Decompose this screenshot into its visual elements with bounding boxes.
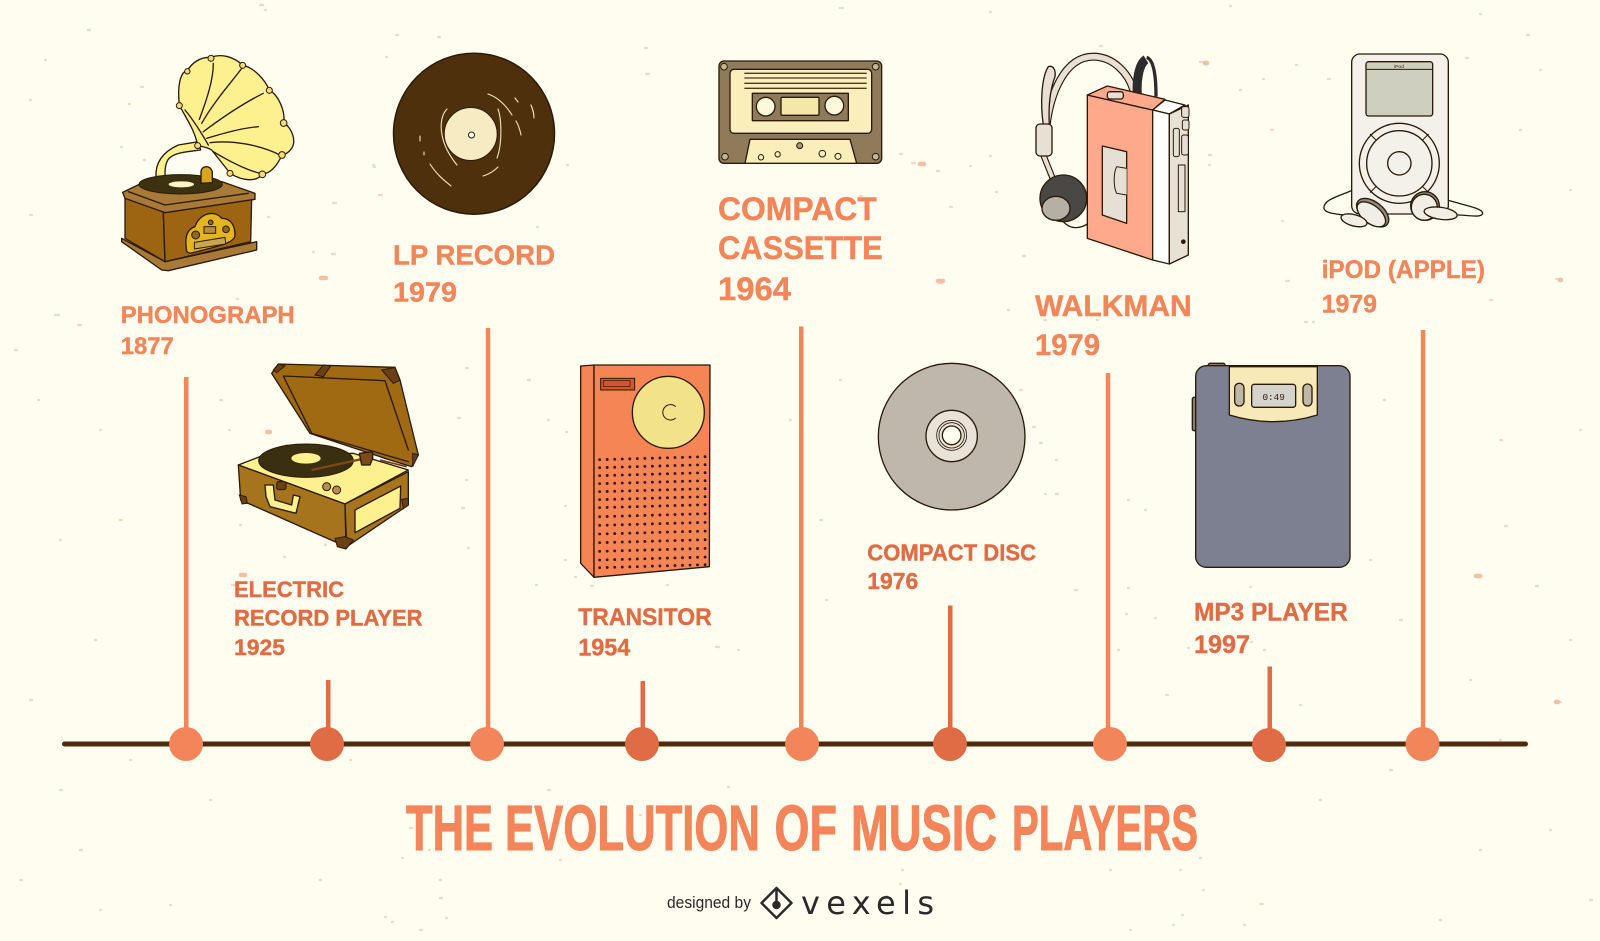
stem: mp3 player	[1268, 666, 1272, 744]
label: compact disc: COMPACT DISC	[867, 540, 1036, 566]
node: compact disc	[933, 727, 967, 761]
node: cassette	[785, 727, 819, 761]
title: EVOLUTION	[505, 792, 760, 864]
node: phonograph	[169, 727, 203, 761]
milestone: compact disc 1976	[867, 363, 1036, 761]
label: electric record player: ELECTRIC	[234, 577, 344, 602]
stem: record player	[326, 680, 330, 744]
label: iPod: 1979	[1322, 290, 1377, 318]
label: transistor	[578, 604, 712, 662]
icon: mp3 player: 0:49	[1262, 392, 1285, 403]
node: record player	[310, 727, 344, 761]
stem: walkman	[1106, 373, 1110, 744]
label: mp3 player	[1194, 599, 1348, 659]
node: iPod	[1406, 727, 1440, 761]
label: compact cassette	[718, 191, 883, 307]
label: walkman	[1035, 290, 1192, 362]
label: walkman: 1979	[1035, 329, 1100, 362]
label: compact disc: 1976	[867, 568, 918, 594]
node: LP record	[470, 727, 504, 761]
icon: gramophone	[122, 55, 294, 271]
icon: walkman with headphones	[1036, 57, 1189, 264]
credit: designed by vexels: vexels	[801, 884, 934, 922]
label: transistor: TRANSITOR	[578, 604, 712, 631]
stem: phonograph	[184, 377, 188, 744]
credit: designed by vexels	[667, 884, 934, 922]
title: OF	[774, 792, 837, 864]
label: compact cassette: COMPACT	[718, 191, 877, 227]
stem: iPod	[1421, 330, 1425, 744]
node: mp3 player	[1252, 728, 1286, 762]
icon: record player	[238, 364, 418, 549]
label: compact cassette: CASSETTE	[718, 230, 883, 266]
icon: iPod with earbuds	[1324, 54, 1483, 233]
label: mp3 player: MP3 PLAYER	[1194, 599, 1348, 627]
milestone: mp3 player 1997	[1192, 363, 1350, 762]
label: compact disc	[867, 540, 1036, 594]
label: compact cassette: 1964	[718, 271, 791, 307]
label: transistor: 1954	[578, 634, 631, 662]
stem: LP record	[486, 328, 490, 744]
icon: cassette tape	[719, 61, 882, 163]
label: phonograph: 1877	[121, 333, 174, 360]
title: PLAYERS	[1012, 792, 1198, 864]
label: LP record	[393, 239, 555, 308]
milestone: compact cassette 1964	[718, 61, 883, 761]
milestone: phonograph 1877	[121, 55, 295, 761]
label: LP record: LP RECORD	[393, 239, 555, 270]
icon: transistor radio	[581, 365, 710, 577]
label: electric record player: RECORD PLAYER	[234, 606, 423, 630]
timeline axis	[62, 742, 1528, 746]
milestone: transistor 1954	[578, 365, 712, 761]
label: iPod	[1322, 256, 1485, 318]
credit: designed by vexels: designed by	[667, 894, 752, 912]
label: electric record player	[234, 577, 423, 660]
label: walkman: WALKMAN	[1035, 290, 1192, 323]
stem: cassette	[799, 326, 804, 744]
milestone: electric record player 1925	[234, 364, 423, 761]
title: MUSIC	[851, 792, 997, 864]
icon: vinyl record	[394, 53, 554, 214]
milestone: walkman 1979	[1035, 57, 1192, 761]
icon: vexels logo	[762, 888, 792, 918]
stem: compact disc	[948, 606, 952, 744]
title: THE	[406, 792, 493, 864]
icon: mp3 player	[1192, 363, 1350, 567]
label: mp3 player: 1997	[1194, 631, 1250, 659]
node: walkman	[1093, 727, 1127, 761]
icon: compact disc	[878, 363, 1025, 510]
label: LP record: 1979	[393, 276, 457, 308]
icon: iPod with earbuds: iPod	[1394, 64, 1404, 70]
label: electric record player: 1925	[234, 635, 285, 660]
label: phonograph: PHONOGRAPH	[121, 302, 295, 329]
label: phonograph	[121, 302, 295, 360]
label: iPod: iPOD (APPLE)	[1322, 256, 1485, 284]
stem: transistor	[640, 681, 645, 744]
title	[406, 792, 1198, 864]
milestone: iPod 1979	[1322, 54, 1485, 761]
node: transistor	[625, 727, 659, 761]
milestone: LP record 1979	[393, 53, 555, 761]
